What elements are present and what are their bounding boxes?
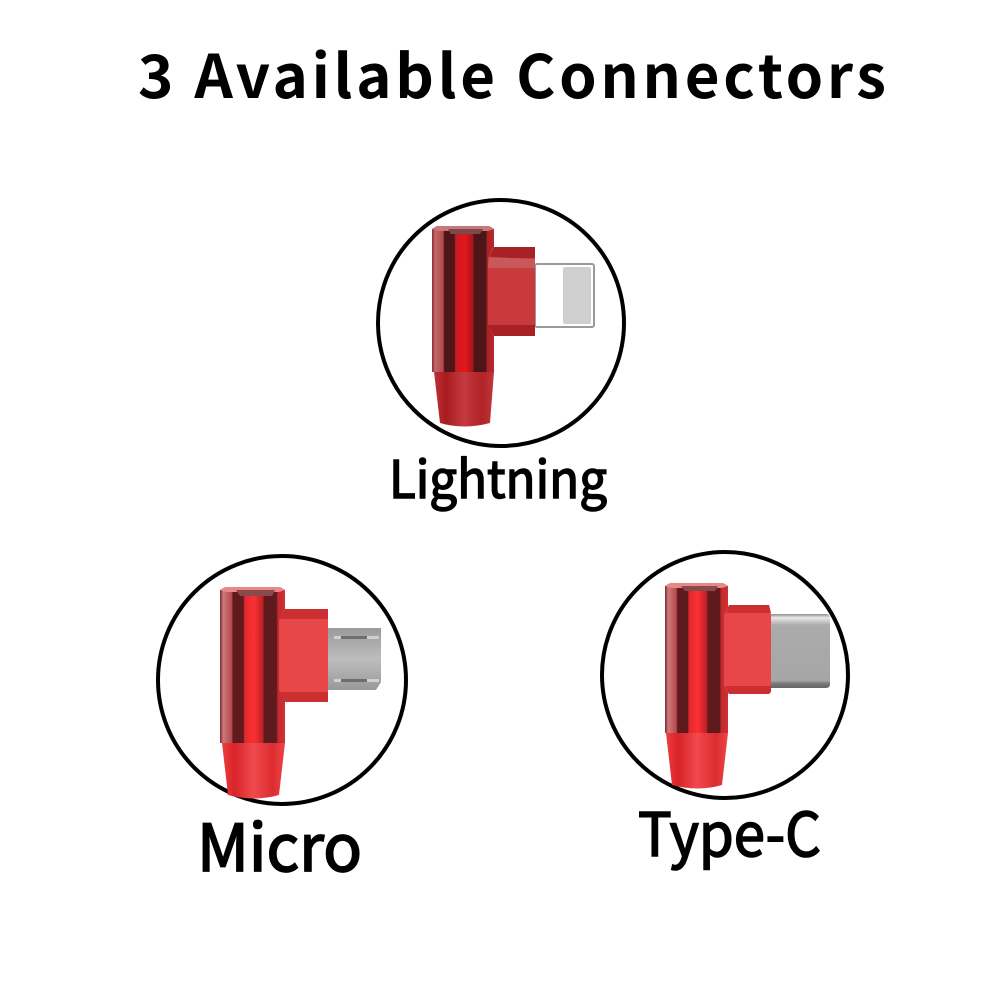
icon: Micro metal plug: [328, 628, 381, 690]
label: Lightning: Lightning: [389, 438, 607, 513]
icon: Micro red adapter: [220, 587, 328, 798]
circle: Micro: [158, 556, 406, 804]
panel: Type-C connector: [602, 552, 848, 798]
label: Type-C: Type-C: [638, 787, 821, 874]
icon: Type-C metal plug: [771, 614, 830, 688]
panel: Micro connector: [158, 556, 406, 804]
label: Micro: Micro: [197, 796, 362, 890]
icon: Lightning metal plug: [535, 264, 594, 327]
panel: Lightning connector: [378, 200, 624, 446]
icon: Type-C red adapter: [665, 583, 771, 788]
title: 3 Available Connectors: [138, 29, 886, 116]
icon: Lightning red adapter: [432, 226, 535, 426]
circle: Type-C: [602, 552, 848, 798]
circle: Lightning: [378, 200, 624, 446]
